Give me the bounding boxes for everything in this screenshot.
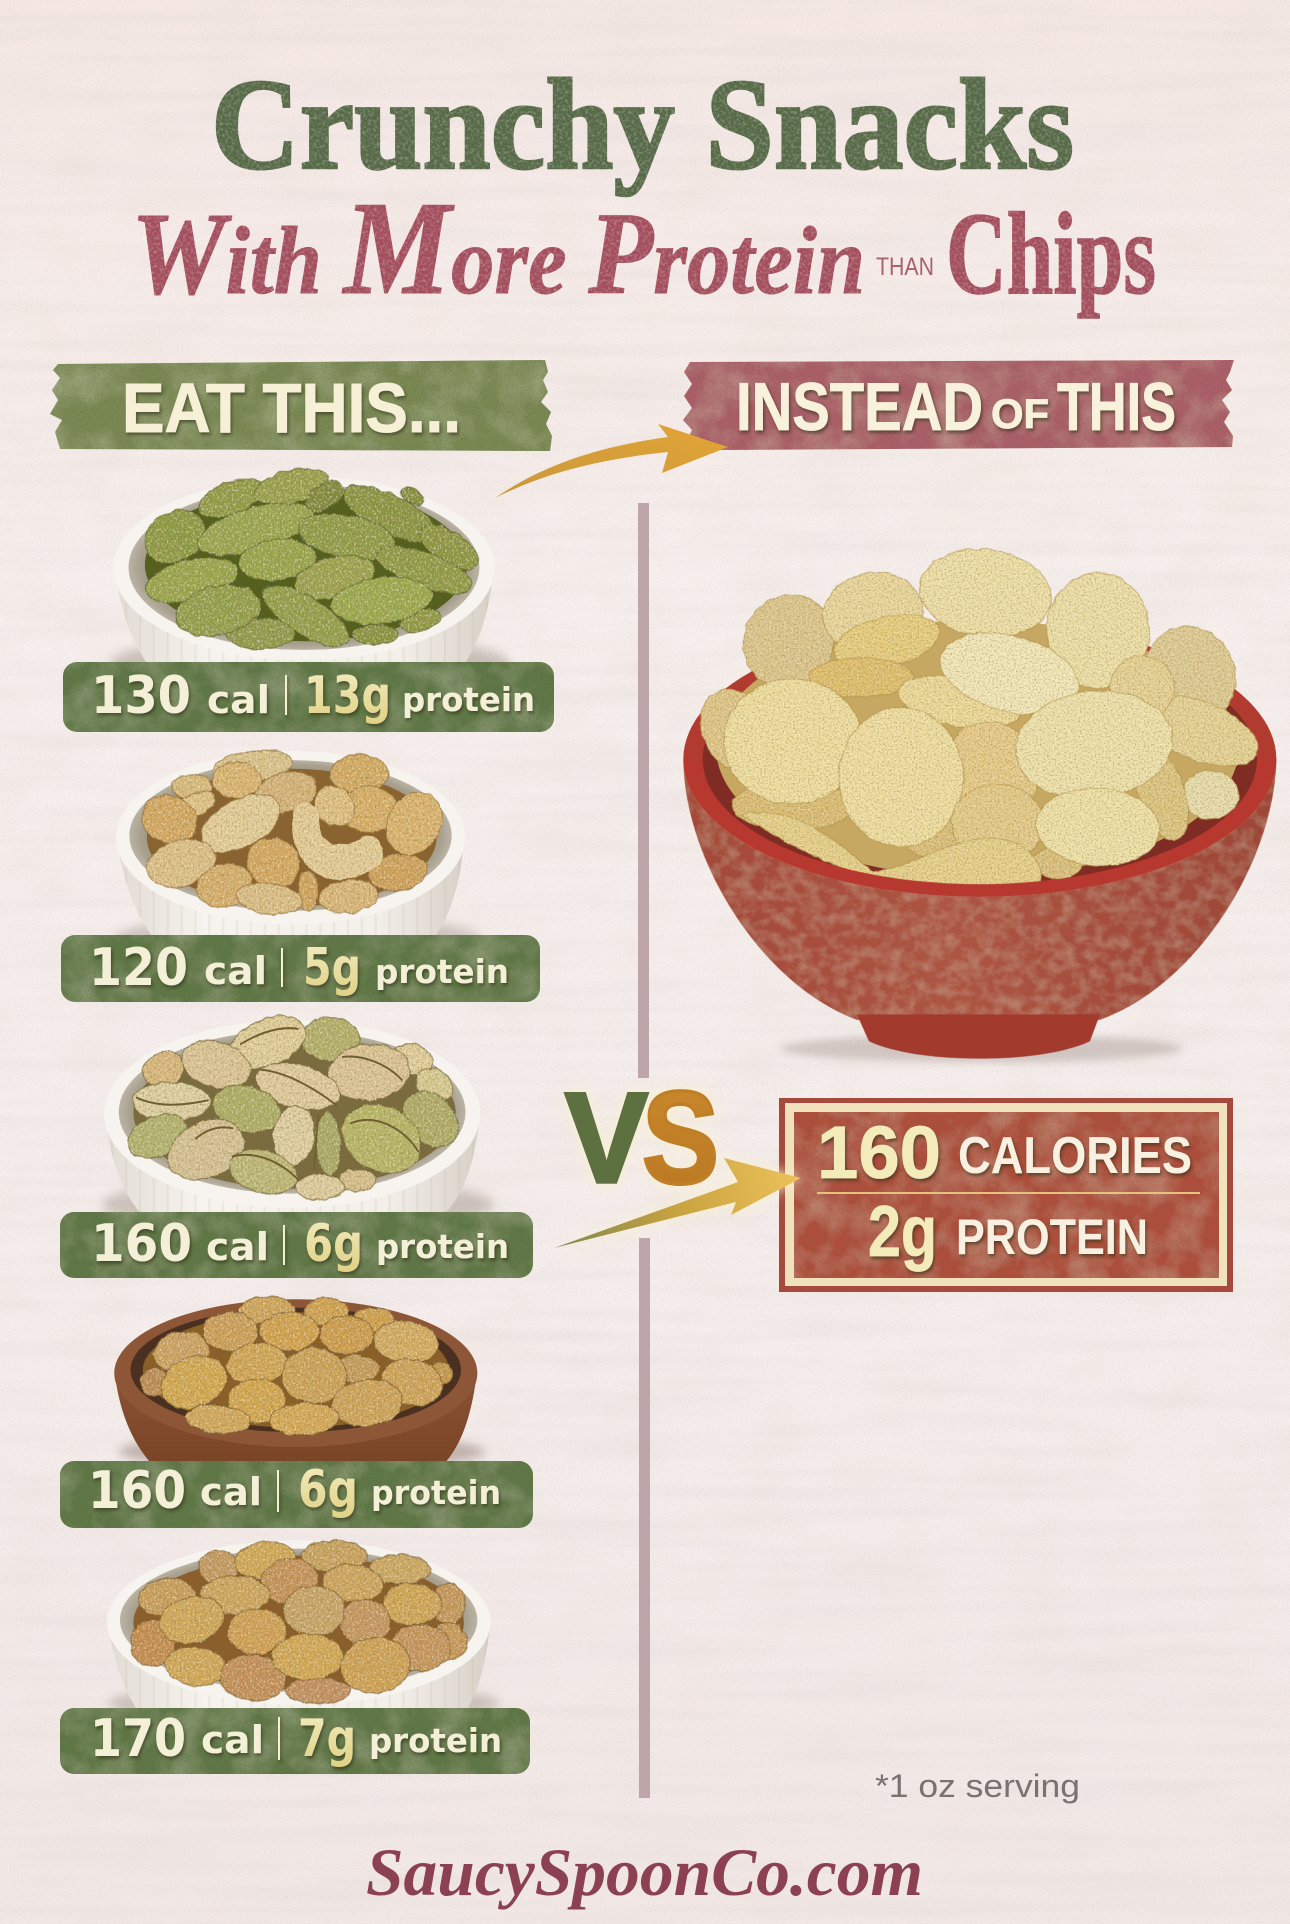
bowl: seasoned chickpeas in wooden bowl [114,1297,486,1470]
VS label [565,1064,719,1211]
stat pill: 130 cal, 13g protein: 130 [91,666,191,726]
bowl foot [857,1014,1100,1059]
stat pill: 170 cal, 7g protein: 7g [298,1709,356,1769]
stat pill: 160 cal, 6g protein (pistachios): 160 [91,1214,192,1274]
stat pill: 160 cal, 6g protein (chickpeas) [60,1460,533,1528]
chip stats box: PROTEIN [956,1209,1148,1265]
banner: instead of this: INSTEAD [736,369,983,445]
title line: With More Protein than Chips: With More Protein [131,174,865,322]
VS label: S [642,1064,719,1211]
stat pill: 120 cal, 5g protein [61,935,540,1002]
title line: With More Protein than Chips: Chips [946,188,1156,319]
stat pill: 120 cal, 5g protein: 5g [303,938,361,998]
chickpeas [141,1297,452,1437]
chip stats box: 2g [868,1192,937,1272]
stat pill: 160 cal, 6g protein (chickpeas): 6g [298,1460,358,1520]
chickpeas [131,1539,467,1704]
stat pill: 160 cal, 6g protein (pistachios): 6g [304,1214,363,1274]
chip stats box [779,1098,1233,1292]
stat pill: 130 cal, 13g protein: protein [402,680,535,719]
stat pill: 130 cal, 13g protein: 13g [304,666,391,726]
pistachio shell slits [137,1028,418,1179]
cashews [139,747,451,918]
bowl rim front [683,759,1276,897]
banner: eat this [50,360,552,451]
bowl: edamame [110,463,510,695]
center divider [638,503,650,1798]
stat pill: 170 cal, 7g protein: cal [201,1718,264,1762]
bowl: seasoned chickpeas in white bowl [107,1539,500,1724]
stat pill: 170 cal, 7g protein: protein [369,1721,502,1760]
stat pill: 120 cal, 5g protein: protein [375,952,509,991]
stat pill: 130 cal, 13g protein [63,662,554,732]
chip stats box: CALORIES [958,1127,1192,1185]
potato chips [688,540,1270,888]
stat pill: 160 cal, 6g protein (chickpeas): protein [371,1473,501,1512]
banner: instead of this: OF [991,390,1049,437]
banner: instead of this [683,360,1234,452]
title line: Crunchy Snacks: Crunchy Snacks [211,53,1074,197]
red bowl of potato chips [683,540,1276,1063]
VS label: V [565,1067,648,1210]
stat pill: 160 cal, 6g protein (pistachios) [60,1212,533,1278]
footer website: SaucySpoonCo.com [366,1834,923,1910]
serving footnote: *1 oz serving [875,1768,1080,1804]
stat pill: 130 cal, 13g protein: cal [207,678,270,722]
bowl: roasted cashews [114,747,481,965]
banner: eat this: EAT THIS... [122,369,461,447]
title line: With More Protein than Chips: THAN [876,253,934,281]
banner: instead of this: THIS [1057,369,1176,445]
stat pill: 120 cal, 5g protein: 120 [89,938,188,998]
stat pill: 160 cal, 6g protein (chickpeas): 160 [88,1461,186,1521]
stat pill: 160 cal, 6g protein (chickpeas): cal [200,1470,262,1514]
stat pill: 170 cal, 7g protein [60,1708,530,1774]
stat pill: 160 cal, 6g protein (pistachios): cal [206,1225,269,1269]
chip stats box: 160 [817,1111,941,1194]
stat pill: 160 cal, 6g protein (pistachios): protein [376,1227,509,1266]
stat pill: 170 cal, 7g protein: 170 [90,1709,186,1769]
arrow: eat this to instead of this [495,424,728,498]
title [131,53,1156,322]
edamame pods [141,463,483,658]
pistachios [123,1007,466,1200]
bowl: pistachios [102,1007,494,1233]
stat pill: 120 cal, 5g protein: cal [204,949,267,993]
bowl body [683,759,1276,1020]
arrow: VS to chip stats [554,1158,801,1248]
